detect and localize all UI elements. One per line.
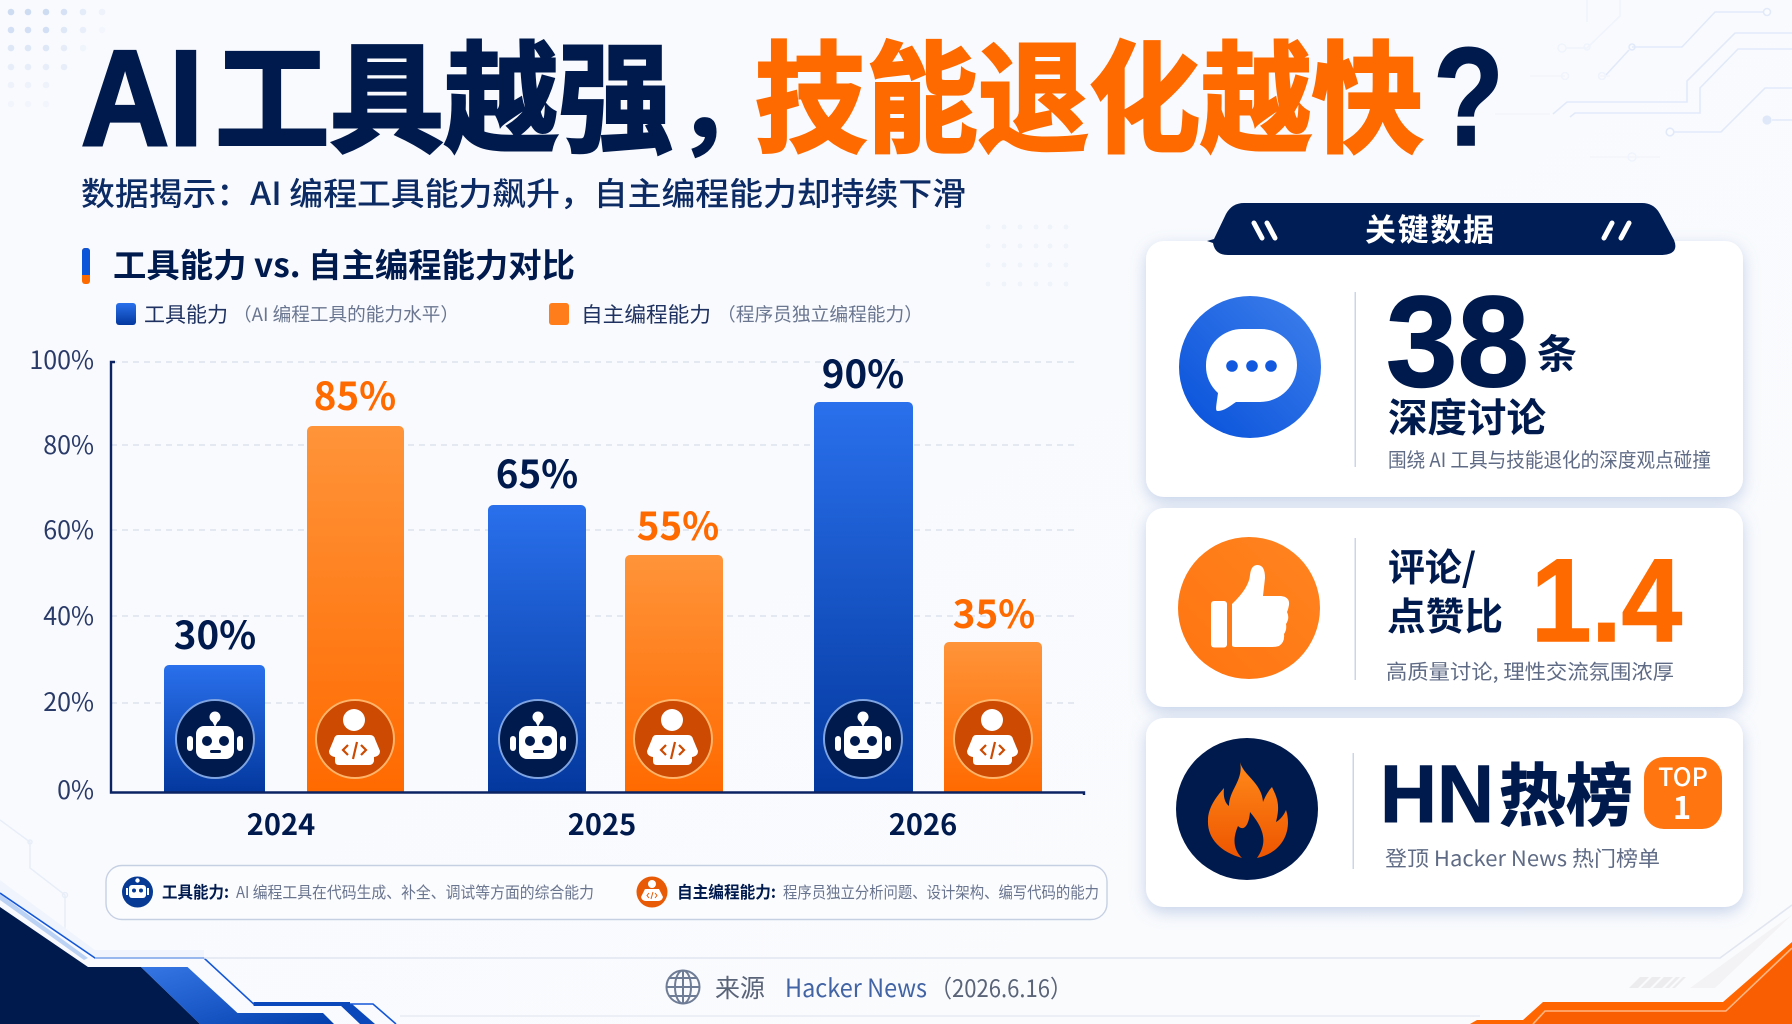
chart section heading: 工具能力 vs. 自主编程能力对比: [113, 239, 575, 287]
definitions note: 程序员独立分析问题、设计架构、编写代码的能力: [783, 879, 1099, 903]
x axis labels: 2025: [568, 802, 636, 844]
bars 2026: 90%: [822, 344, 904, 400]
bars 2025: 65%: [496, 444, 578, 500]
panel: discussion stat card: 围绕 AI 工具与技能退化的深度观点碰撞: [1388, 444, 1711, 473]
source footer: 来源: [715, 969, 765, 1005]
definitions note: [106, 866, 1107, 920]
icon: thumbs up: [1178, 537, 1320, 679]
bars 2026: 35%: [953, 584, 1035, 640]
chart legend: （AI 编程工具的能力水平）: [233, 301, 459, 327]
y axis labels: [29, 341, 94, 807]
panel: discussion stat card: 条: [1537, 322, 1577, 380]
panel: HN ranking stat card: 登顶 Hacker News 热门榜单: [1385, 843, 1660, 873]
dot pattern top left: [8, 9, 105, 107]
icon: flame: [1176, 738, 1318, 880]
panel: HN ranking stat card: HN: [1380, 749, 1494, 840]
icon: chat bubble: [1179, 296, 1321, 438]
key data banner: [1207, 203, 1675, 255]
definitions note: 工具能力:: [162, 879, 229, 903]
chart legend: 自主编程能力: [581, 299, 711, 329]
panel: discussion stat card: 38: [1386, 270, 1529, 414]
badge: top 1: [1644, 757, 1722, 829]
panel: discussion stat card: [1146, 241, 1743, 497]
title: 工具越强: [215, 3, 673, 177]
y axis labels: 0%: [57, 771, 94, 807]
panel: comment ratio stat card: 点赞比: [1387, 586, 1503, 641]
badge: top 1: TOP: [1658, 758, 1708, 794]
subtitle: 数据揭示：AI 编程工具能力飙升，自主编程能力却持续下滑: [81, 169, 966, 215]
definitions note: AI 编程工具在代码生成、补全、调试等方面的综合能力: [236, 879, 594, 903]
title: [81, 3, 1504, 177]
panel: HN ranking stat card: [1146, 718, 1743, 907]
key data banner: 关键数据: [1365, 205, 1494, 250]
chart legend: （程序员独立编程能力）: [717, 301, 923, 327]
x axis labels: 2024: [247, 802, 315, 844]
title: AI: [81, 22, 203, 174]
source footer: Hacker News: [785, 969, 927, 1005]
title: 技能退化越快: [755, 3, 1423, 177]
panel: comment ratio stat card: 1.4: [1531, 535, 1682, 667]
source footer: （2026.6.16）: [930, 969, 1072, 1004]
badge: top 1: 1: [1673, 783, 1691, 828]
bars 2025: [488, 444, 723, 792]
corner decoration bottom right: [204, 905, 1792, 1024]
source footer: [666, 969, 1072, 1005]
corner decoration bottom left: [0, 880, 396, 1024]
definitions note: 自主编程能力:: [677, 879, 776, 903]
bars 2025: 55%: [637, 496, 719, 552]
icon: globe: [666, 970, 700, 1004]
small robot icon: [122, 876, 153, 908]
y axis labels: 100%: [29, 341, 94, 377]
title: ?: [1433, 18, 1504, 175]
panel: comment ratio stat card: 评论/: [1388, 537, 1476, 592]
small person icon: [636, 876, 668, 908]
bars 2024: [164, 366, 404, 792]
bars 2024: 30%: [174, 605, 256, 661]
x axis labels: 2026: [889, 802, 957, 844]
y axis labels: 80%: [43, 426, 94, 462]
circuit lines top right: [1495, 0, 1792, 161]
panel: comment ratio stat card: [1146, 508, 1743, 707]
axes: [111, 362, 1084, 795]
y axis labels: 60%: [43, 511, 94, 547]
y axis labels: 40%: [43, 597, 94, 633]
x axis labels: [247, 802, 957, 844]
circuit lines bottom left: [0, 820, 68, 930]
bars 2026: [814, 344, 1042, 792]
dot pattern mid: [986, 224, 1068, 286]
chart legend: [116, 299, 923, 329]
panel: comment ratio stat card: 高质量讨论, 理性交流氛围浓厚: [1386, 655, 1674, 685]
y axis labels: 20%: [43, 683, 94, 719]
bar chart: [29, 341, 1084, 844]
title: ，: [675, 22, 780, 174]
panel: discussion stat card: 深度讨论: [1388, 387, 1546, 444]
panel: HN ranking stat card: 热榜: [1499, 741, 1633, 840]
chart legend: 工具能力: [144, 299, 228, 329]
bars 2024: 85%: [314, 366, 396, 422]
